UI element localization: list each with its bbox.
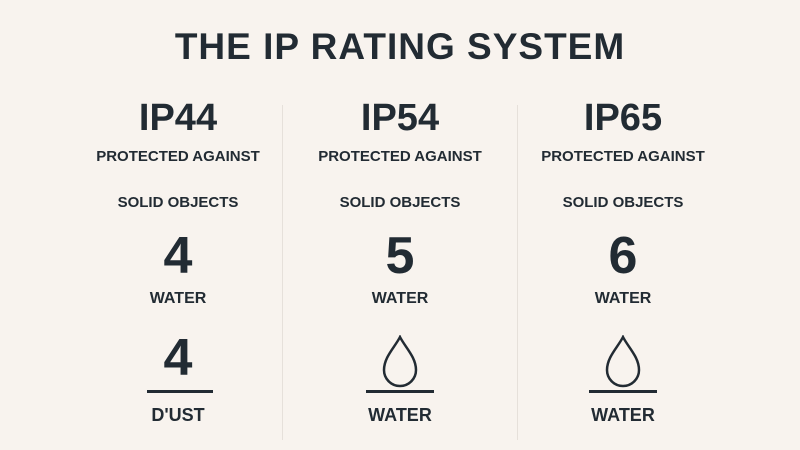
number: 4: 4 [164, 329, 192, 387]
label: water: WATER [368, 405, 432, 425]
icon: water drop [606, 335, 640, 388]
text: protected against: PROTECTED AGAINST [318, 148, 482, 165]
panel: IP54 [318, 97, 482, 425]
underline [366, 390, 434, 393]
text: solid objects: SOLID OBJECTS [118, 194, 238, 211]
number: 5: 5 [386, 227, 414, 285]
text: water: WATER [150, 290, 206, 307]
text: water: WATER [595, 290, 651, 307]
panel: IP44 [96, 97, 260, 425]
underline [589, 390, 657, 393]
text: solid objects: SOLID OBJECTS [340, 194, 460, 211]
heading: IP65: IP65 [584, 97, 662, 139]
icon: water drop [382, 335, 418, 388]
underline [147, 390, 213, 393]
text: solid objects: SOLID OBJECTS [563, 194, 683, 211]
text: protected against: PROTECTED AGAINST [96, 148, 260, 165]
panel: IP65 [541, 97, 705, 425]
title: THE IP RATING SYSTEM [175, 26, 625, 67]
heading: IP54: IP54 [361, 97, 439, 139]
label: water: WATER [591, 405, 655, 425]
label: dust: D'UST [151, 405, 205, 425]
heading: IP44: IP44 [139, 97, 217, 139]
text: water: WATER [372, 290, 428, 307]
text: protected against: PROTECTED AGAINST [541, 148, 705, 165]
number: 6: 6 [609, 227, 637, 285]
number: 4: 4 [164, 227, 192, 285]
